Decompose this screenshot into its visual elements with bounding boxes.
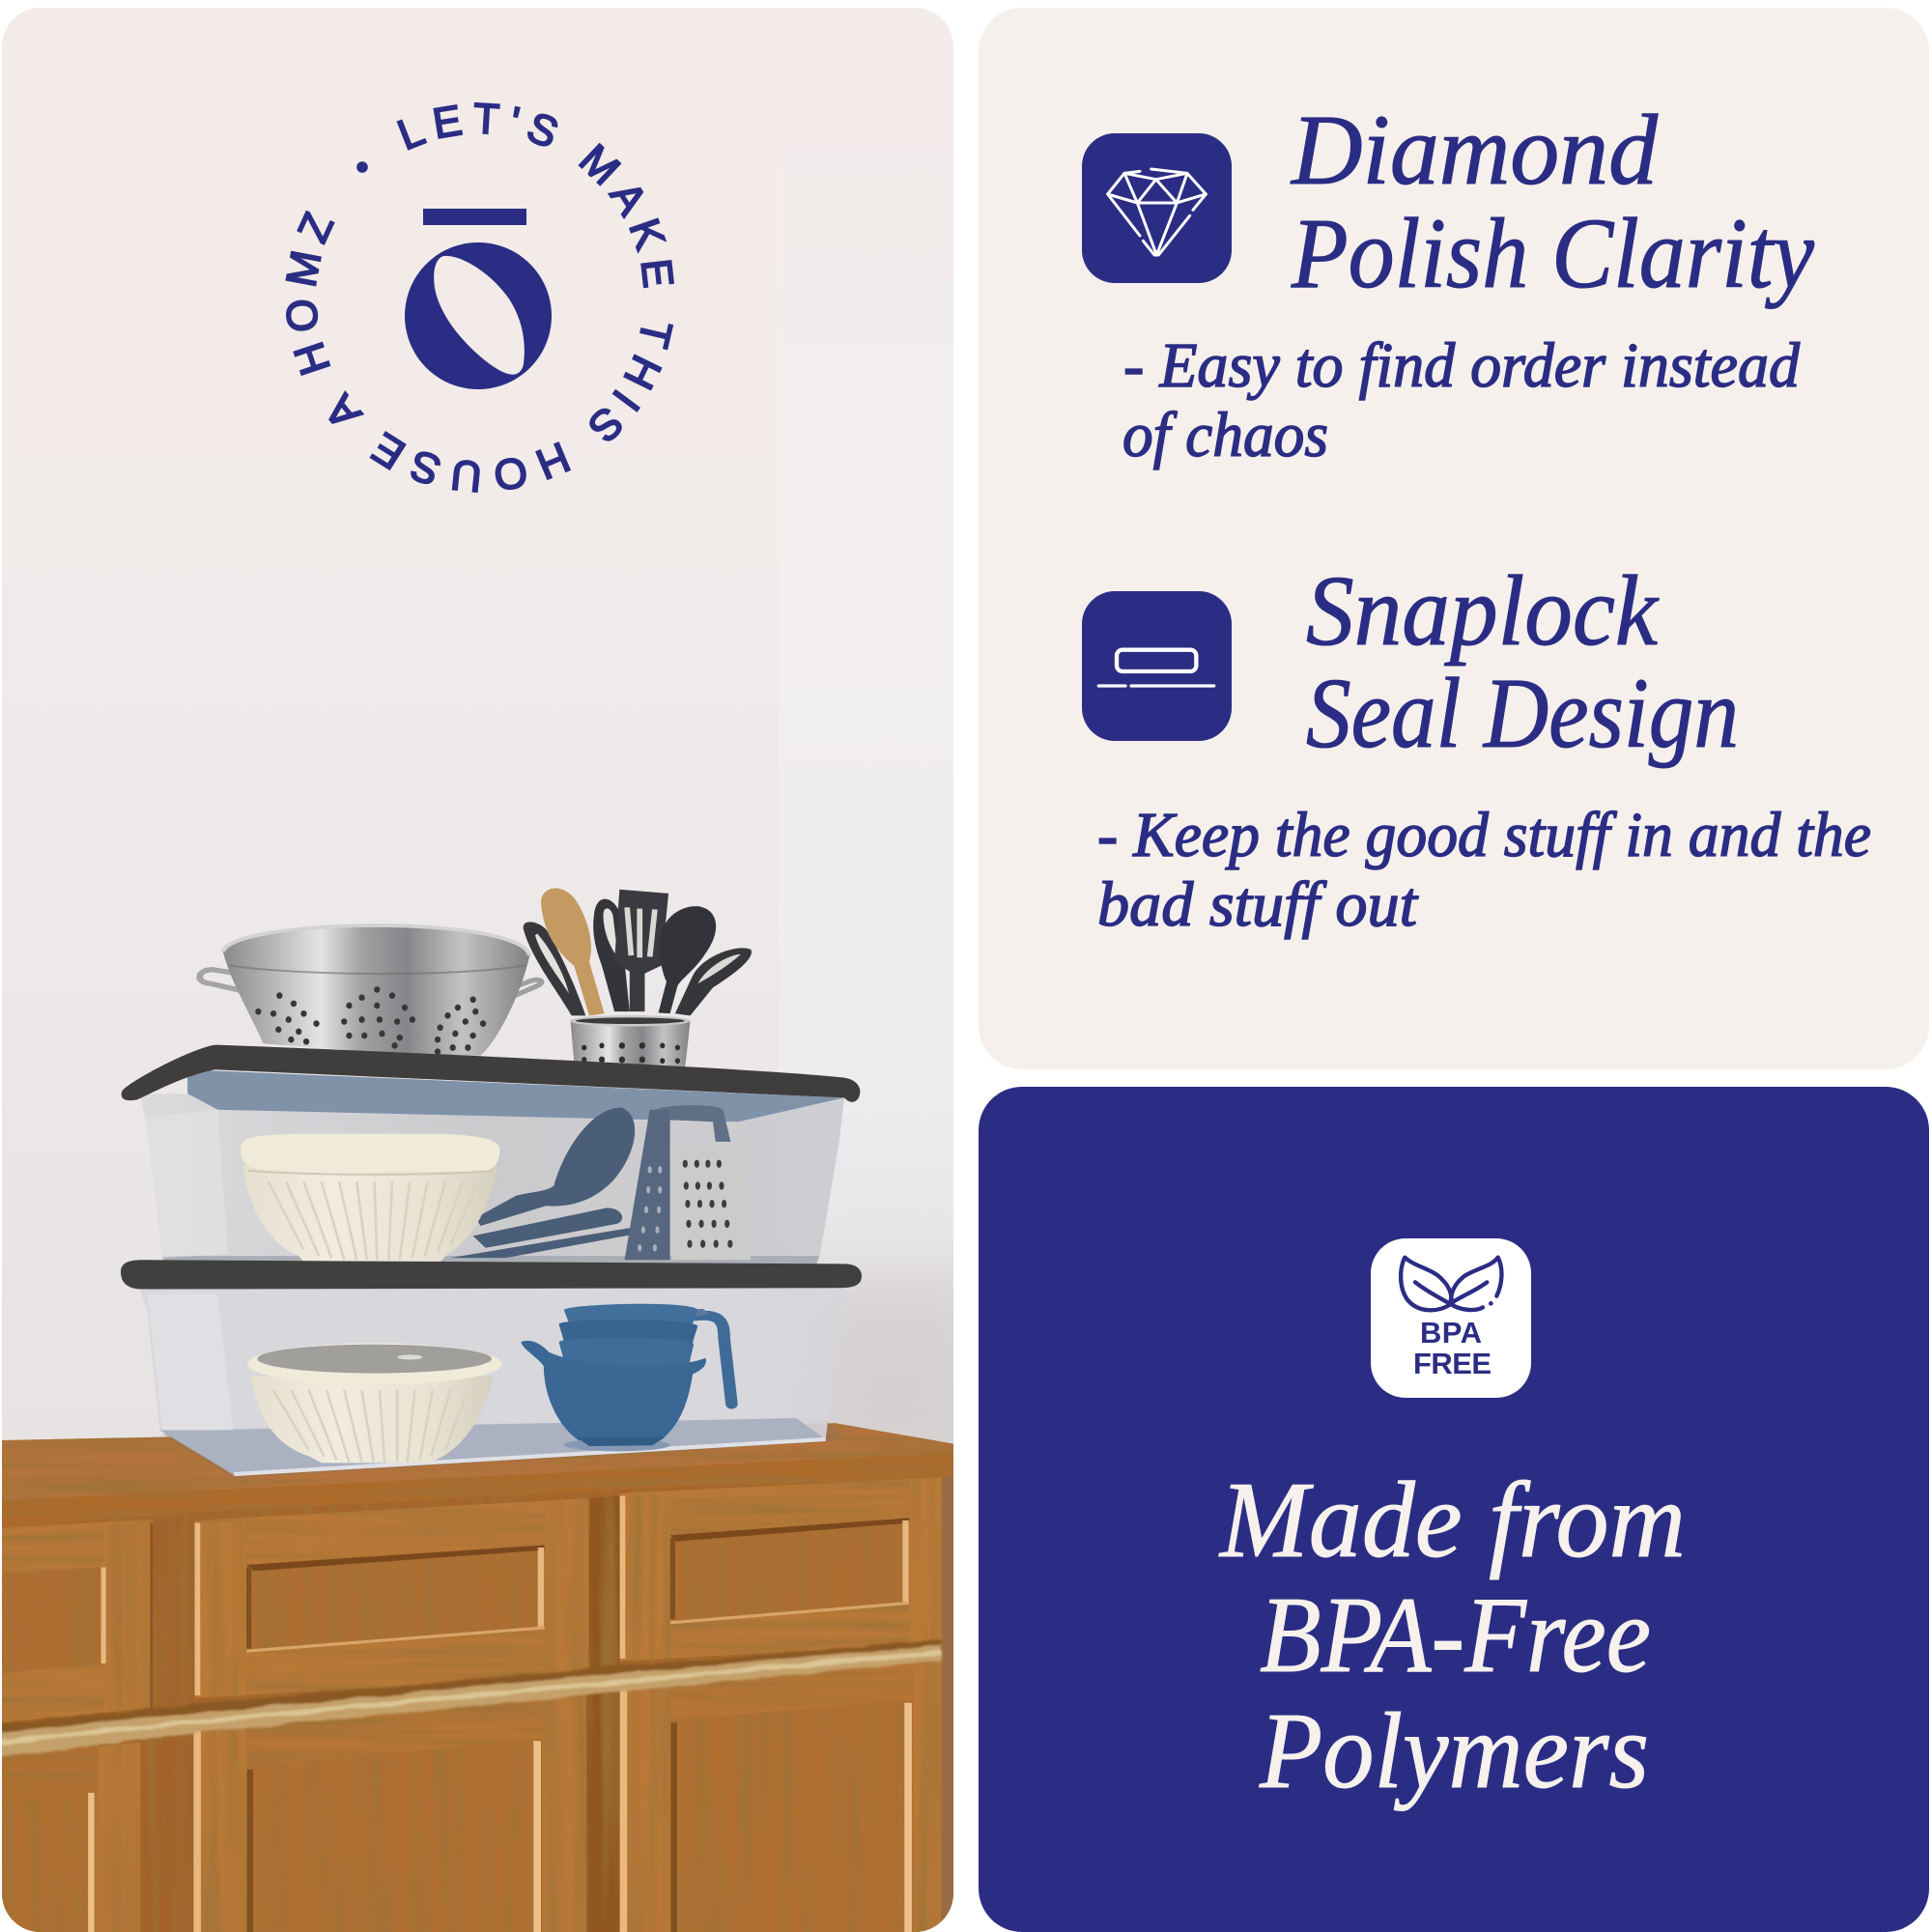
logo circle [405, 242, 552, 389]
panel: features [979, 8, 1929, 1069]
panel: kitchen photo [2, 8, 953, 1932]
logo bar [423, 209, 526, 225]
heading: snaplock seal design [1306, 555, 1739, 769]
heading: diamond polish clarity: Diamond [1290, 95, 1659, 206]
text: snaplock description: bad stuff out [1097, 869, 1419, 940]
upper left door [0, 1520, 153, 1722]
heading: diamond polish clarity: Polish Clarity [1291, 198, 1815, 309]
blue measuring cups [521, 1304, 731, 1451]
tub shadow on counter [162, 1418, 844, 1478]
blue ladles [450, 1108, 647, 1258]
upper center door [195, 1498, 589, 1698]
heading: made from BPA-free polymers: Made from [1218, 1461, 1686, 1580]
wall background [0, 0, 985, 1507]
colander [200, 925, 541, 1056]
grater [625, 1105, 751, 1260]
logo ring [285, 102, 674, 493]
heading: snaplock seal design: Snaplock [1306, 555, 1660, 667]
panel: BPA free [979, 1087, 1929, 1932]
seam band [0, 1640, 941, 1757]
utensils [524, 889, 752, 1015]
storage tubs and kitchenware [121, 889, 862, 1478]
upper right door [620, 1477, 941, 1661]
text: snaplock description: - Keep the good stuff in and the [1097, 800, 1871, 870]
text: diamond description: - Easy to find order instead [1123, 330, 1801, 401]
heading: made from BPA-free polymers: Polymers [1259, 1691, 1649, 1811]
lids [121, 1045, 862, 1290]
lower left door [0, 1743, 140, 1932]
cabinet gaps [143, 1474, 967, 1932]
top tub [139, 1069, 844, 1264]
cream bowl upper [241, 1134, 499, 1262]
circular tagline: LET'S MAKE THIS HOUSE A HOMZ [285, 102, 674, 493]
lower center door [193, 1690, 586, 1932]
cabinet body [0, 1466, 967, 1932]
text: snaplock description [1097, 800, 1871, 940]
text: diamond description [1122, 330, 1801, 470]
utensil holder [570, 1015, 691, 1066]
countertop [0, 1423, 955, 1528]
cream bowl lower [247, 1343, 501, 1463]
bottom tub [139, 1288, 844, 1476]
lower right door [620, 1659, 941, 1932]
icon: diamond [1082, 133, 1232, 283]
colander holes [255, 986, 486, 1055]
heading: made from BPA-free polymers: BPA-Free [1260, 1576, 1651, 1695]
heading: made from BPA-free polymers [1218, 1461, 1686, 1811]
heading: snaplock seal design: Seal Design [1306, 658, 1739, 769]
icon: snaplock seal [1082, 591, 1232, 741]
cabinet [0, 1423, 967, 1932]
icon: BPA free badge: FREE [1413, 1347, 1492, 1380]
icon: BPA free badge: BPA [1420, 1316, 1482, 1350]
text: diamond description: of chaos [1122, 400, 1328, 470]
heading: diamond polish clarity [1290, 95, 1815, 309]
tagline dot [356, 161, 368, 173]
icon: BPA free badge [1371, 1238, 1531, 1398]
